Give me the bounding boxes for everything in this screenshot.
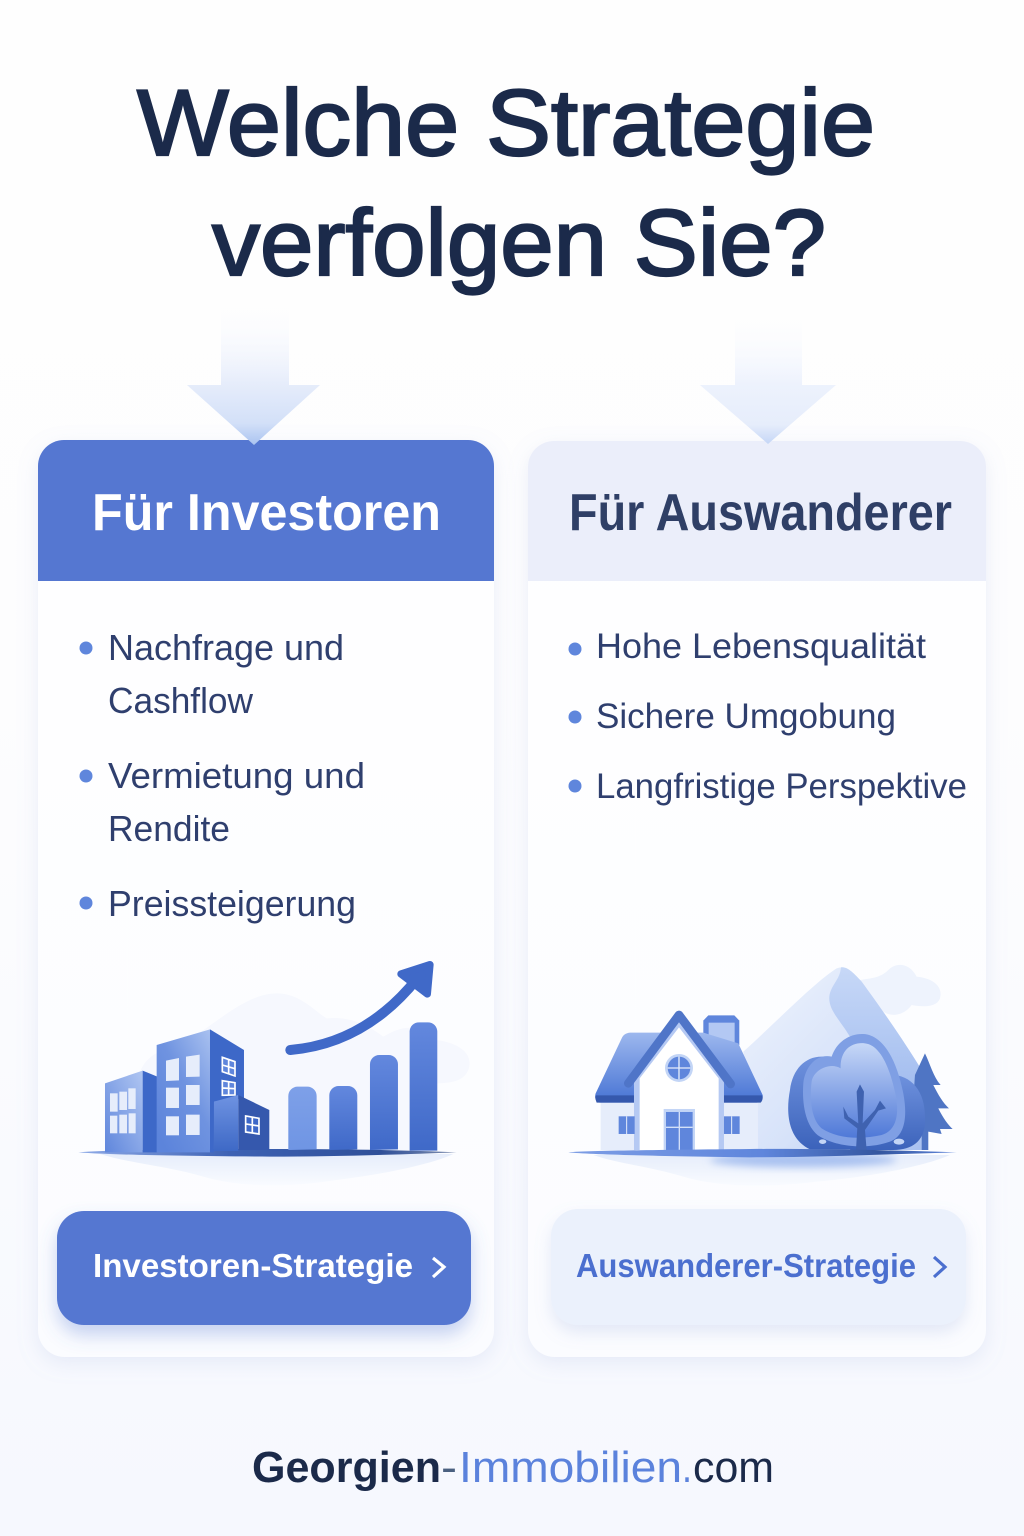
illustration: buildings and growth chart (78, 965, 470, 1185)
button: Auswanderer-Strategie (551, 1209, 966, 1325)
button: Investoren-Strategie: Investoren-Strategie (93, 1247, 413, 1284)
footer: website: - (441, 1443, 457, 1492)
bullet list: emigrants: Sichere Umgobung (596, 697, 896, 736)
icon: chevron (433, 1258, 444, 1277)
arrow: to investors (187, 300, 320, 445)
arrow: to emigrants (700, 310, 836, 444)
bullet list: investors: Vermietung und (108, 755, 365, 796)
bullet list: investors: Nachfrage und (108, 627, 344, 668)
bullet list: investors: Cashflow (108, 680, 254, 721)
panel: Für Investoren (38, 440, 494, 1357)
bullet list: emigrants: Langfristige Perspektive (596, 767, 967, 806)
illustration: house, mountain and trees (568, 965, 957, 1186)
footer: website: Georgien (252, 1443, 441, 1492)
title: verfolgen Sie? (212, 190, 826, 295)
title (137, 70, 875, 295)
icon: chevron (934, 1257, 945, 1277)
bullet list: investors (80, 627, 365, 924)
button: Auswanderer-Strategie: Auswanderer-Strategie (576, 1247, 916, 1284)
footer: website: . (682, 1443, 692, 1492)
title: Welche Strategie (137, 70, 875, 175)
heading: Für Auswanderer: Für Auswanderer (569, 484, 952, 542)
heading: Für Investoren: Für Investoren (92, 484, 441, 542)
bullet list: emigrants: Hohe Lebensqualität (596, 627, 926, 666)
bullet list: investors: Preissteigerung (108, 883, 356, 924)
panel header: Für Auswanderer (528, 441, 986, 581)
bullet list: investors: Rendite (108, 808, 230, 849)
panel: Für Auswanderer (528, 441, 986, 1357)
bullet list: emigrants (568, 627, 967, 806)
footer: website: com (693, 1443, 774, 1492)
footer: website: Immobilien (459, 1443, 682, 1492)
button: Investoren-Strategie (57, 1211, 471, 1325)
panel header: Für Investoren (38, 440, 494, 581)
